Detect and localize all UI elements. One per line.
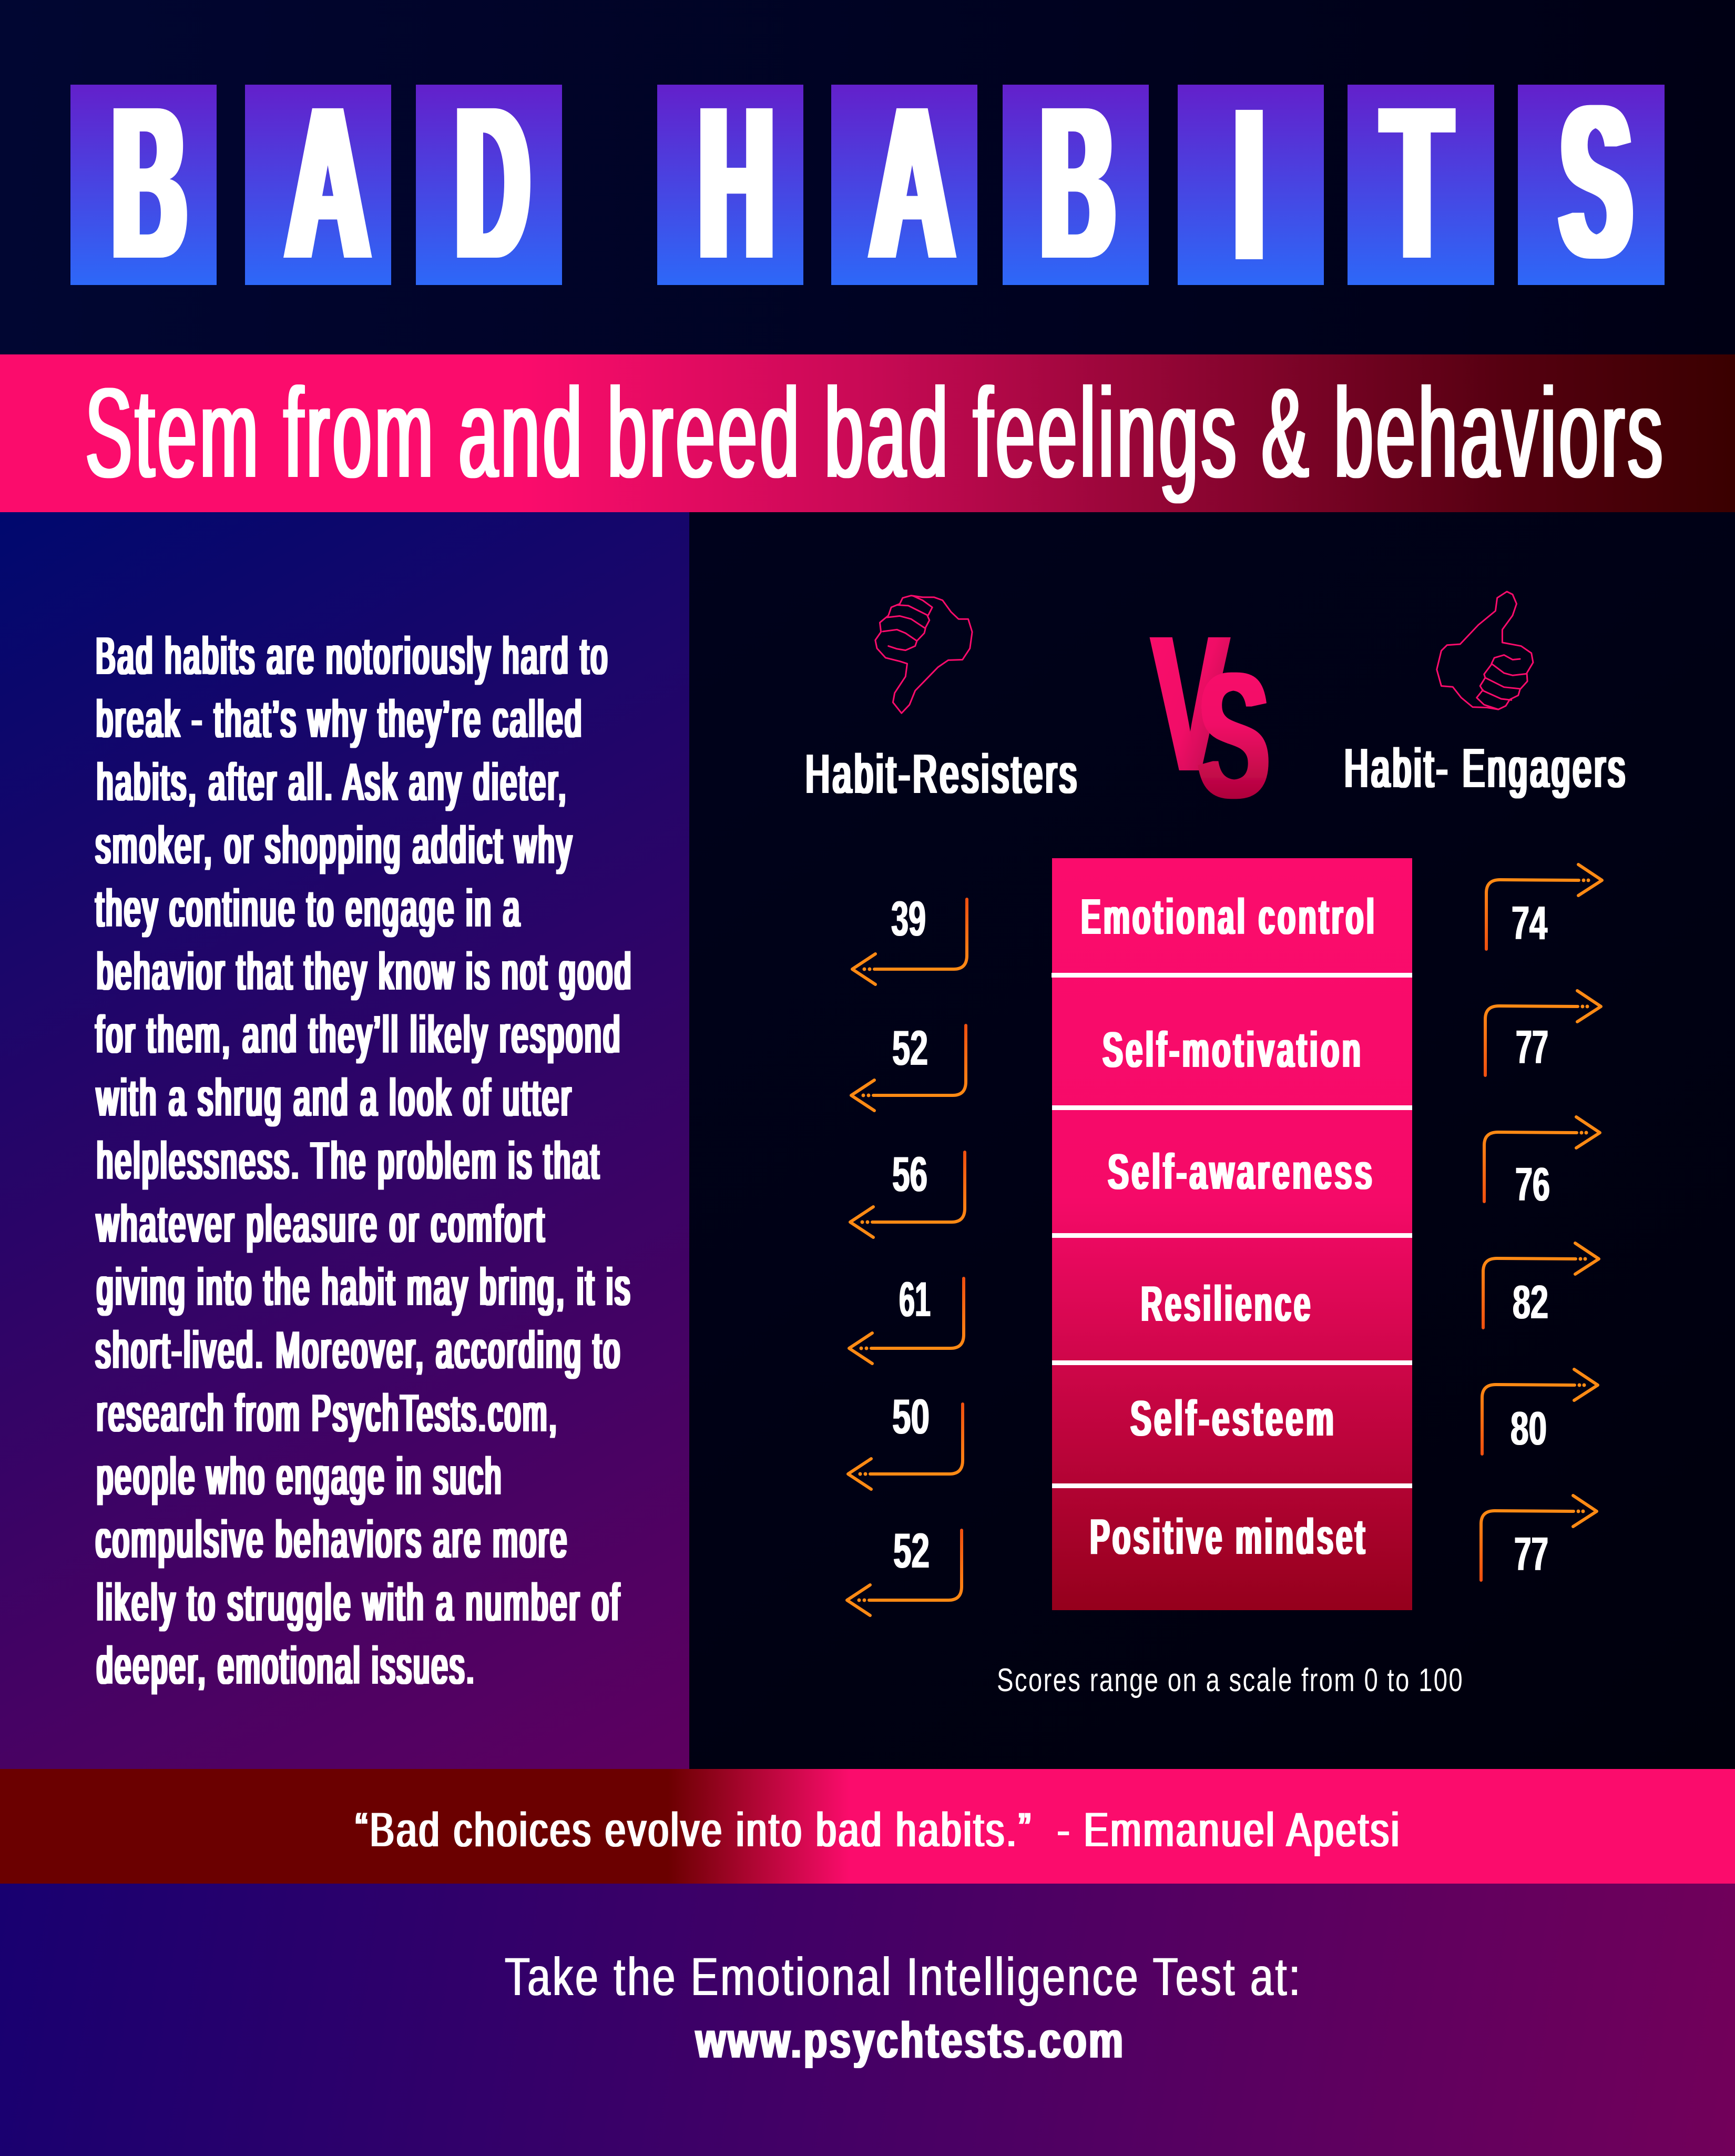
scores: habit-engagers bbox=[1481, 865, 1602, 1581]
tile: H bbox=[657, 61, 803, 304]
call to action: Take the Emotional Intelligence Test at: bbox=[505, 1947, 1302, 2007]
score: 52: 52 bbox=[893, 1523, 930, 1578]
website: www.psychtests.com bbox=[695, 2011, 1125, 2069]
score: 74: 74 bbox=[1512, 897, 1547, 950]
arrow: left 2 bbox=[851, 1025, 966, 1111]
tile: T bbox=[1348, 62, 1494, 304]
panel: left intro background bbox=[0, 512, 689, 1769]
intro paragraph: Bad habits are notoriously hard to bbox=[96, 627, 609, 685]
intro paragraph: research from PsychTests.com, bbox=[97, 1384, 559, 1442]
heading: VS mark: S bbox=[1198, 635, 1270, 835]
tile: A: A bbox=[287, 62, 369, 304]
tile: B bbox=[70, 62, 217, 304]
arrow: left 6 bbox=[847, 1530, 962, 1615]
arrow: right 2 bbox=[1485, 991, 1601, 1075]
intro paragraph: for them, and they’ll likely respond bbox=[96, 1005, 622, 1063]
intro paragraph: they continue to engage in a bbox=[96, 879, 522, 937]
scale note: Scores range on a scale from 0 to 100 bbox=[997, 1662, 1464, 1699]
quote banner bbox=[0, 1769, 1735, 1884]
intro paragraph: break - that’s why they’re called bbox=[96, 690, 584, 748]
intro paragraph: habits, after all. Ask any dieter, bbox=[97, 753, 568, 811]
label: Emotional control: Emotional control bbox=[1081, 889, 1377, 945]
intro paragraph: whatever pleasure or comfort bbox=[96, 1195, 546, 1253]
label: Self-motivation: Self-motivation bbox=[1103, 1022, 1363, 1078]
arrow: left 5 bbox=[848, 1404, 963, 1489]
tile: B: B bbox=[1041, 62, 1115, 304]
tile: H: H bbox=[699, 61, 774, 304]
top background bbox=[0, 0, 1735, 354]
score: 76: 76 bbox=[1515, 1158, 1550, 1211]
intro paragraph bbox=[96, 627, 633, 1694]
tile: D: D bbox=[456, 62, 529, 304]
score: 61: 61 bbox=[899, 1272, 931, 1327]
arrow: right 4 bbox=[1483, 1243, 1599, 1328]
panel: trait column bbox=[1052, 858, 1412, 1610]
tile: B bbox=[1003, 62, 1149, 304]
intro paragraph: likely to struggle with a number of bbox=[97, 1573, 621, 1631]
score: 52: 52 bbox=[892, 1020, 928, 1075]
heading: VS mark bbox=[1151, 596, 1270, 835]
arrow: right 6 bbox=[1481, 1496, 1597, 1580]
icon: thumbs down bbox=[875, 596, 972, 713]
arrow: left 3 bbox=[850, 1152, 965, 1237]
quote banner: “Bad choices evolve into bad habits.” - Emmanuel Apetsi bbox=[355, 1803, 1401, 1857]
intro paragraph: helplessness. The problem is that bbox=[97, 1132, 601, 1189]
heading: Habit-Resisters: Habit-Resisters bbox=[805, 744, 1079, 804]
tile: D bbox=[416, 62, 562, 304]
arrow: right 1 bbox=[1486, 865, 1602, 949]
tile: I: I bbox=[1223, 64, 1275, 306]
score: 77: 77 bbox=[1514, 1528, 1548, 1581]
tile: A: A bbox=[871, 62, 954, 304]
score: 77: 77 bbox=[1516, 1021, 1548, 1074]
tile: B: B bbox=[113, 62, 186, 304]
tile: I bbox=[1178, 64, 1324, 306]
score: 39: 39 bbox=[891, 891, 926, 946]
label: Self-esteem: Self-esteem bbox=[1130, 1390, 1336, 1447]
score: 56: 56 bbox=[892, 1146, 927, 1202]
score: 80: 80 bbox=[1511, 1402, 1547, 1455]
intro paragraph: smoker, or shopping addict why bbox=[96, 816, 574, 874]
tile: A bbox=[245, 62, 391, 304]
intro paragraph: short-lived. Moreover, according to bbox=[96, 1321, 622, 1379]
arrow: left 4 bbox=[849, 1278, 964, 1364]
title: BAD HABITS letter tiles bbox=[70, 60, 1665, 306]
arrow: right 5 bbox=[1482, 1369, 1598, 1454]
footer panel bbox=[0, 1884, 1735, 2156]
label: Self-awareness: Self-awareness bbox=[1108, 1144, 1375, 1200]
score: 50: 50 bbox=[892, 1389, 930, 1444]
label: Resilience: Resilience bbox=[1141, 1276, 1313, 1332]
tile: T: T bbox=[1383, 62, 1451, 304]
intro paragraph: with a shrug and a look of utter bbox=[96, 1069, 573, 1126]
intro paragraph: giving into the habit may bring, it is bbox=[97, 1258, 632, 1316]
tile: S bbox=[1518, 60, 1665, 303]
tile: A bbox=[831, 62, 977, 304]
intro paragraph: behavior that they know is not good bbox=[97, 942, 633, 1000]
icon: thumbs up bbox=[1437, 592, 1533, 709]
arrow: right 3 bbox=[1484, 1117, 1600, 1202]
score: 82: 82 bbox=[1513, 1276, 1548, 1329]
tile: S: S bbox=[1560, 60, 1631, 303]
intro paragraph: people who engage in such bbox=[97, 1447, 503, 1505]
arrow: left 1 bbox=[852, 899, 967, 984]
heading: VS mark: V bbox=[1151, 596, 1229, 812]
intro paragraph: compulsive behaviors are more bbox=[96, 1510, 569, 1568]
intro paragraph: deeper, emotional issues. bbox=[97, 1636, 476, 1694]
panel: right comparison background bbox=[689, 512, 1735, 1769]
scores: habit-resisters bbox=[847, 891, 967, 1615]
label: Positive mindset: Positive mindset bbox=[1090, 1509, 1367, 1565]
